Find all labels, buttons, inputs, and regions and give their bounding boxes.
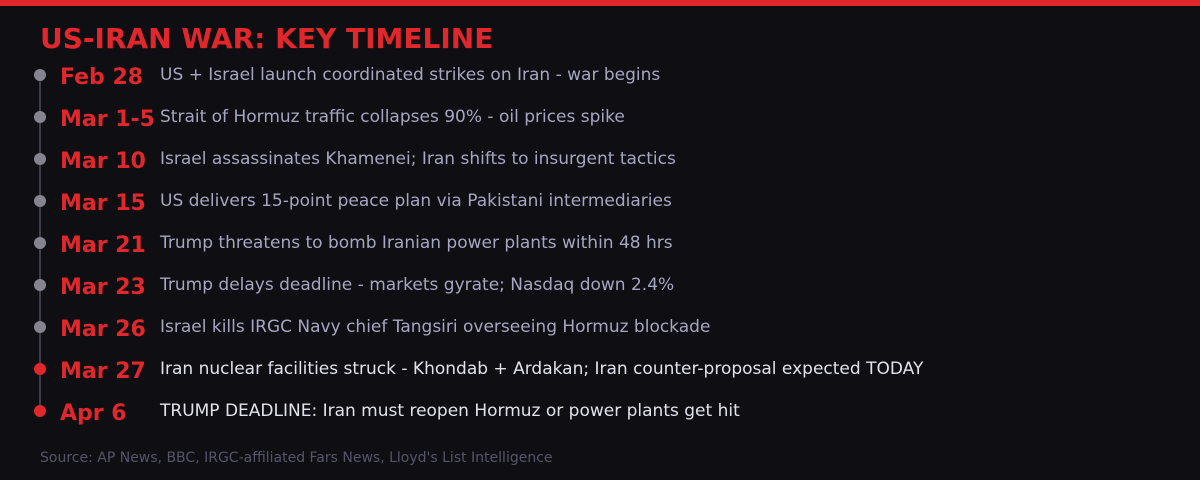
- event: Mar 21: Trump threatens to bomb Iranian power plants within 48 hrs: [160, 233, 673, 253]
- event: Feb 28: [34, 65, 660, 90]
- event: Mar 21: Mar 21: [60, 233, 146, 258]
- event: Mar 15: US delivers 15-point peace plan via Pakistani intermediaries: [160, 191, 672, 211]
- event: Apr 6: [34, 401, 740, 426]
- event: Mar 10: Israel assassinates Khamenei; Iran shifts to insurgent tactics: [160, 149, 676, 169]
- event: Mar 10: [34, 149, 676, 174]
- event: Mar 26: [34, 317, 710, 342]
- timeline: [34, 65, 924, 426]
- event: Mar 26: Mar 26: [60, 317, 146, 342]
- event: Mar 1-5: Mar 1-5: [60, 107, 155, 132]
- source: Source: AP News, BBC, IRGC-affiliated Fars News, Lloyd's List Intelligence: [40, 450, 553, 466]
- event: Mar 21: [34, 233, 673, 258]
- event: Mar 26: Israel kills IRGC Navy chief Tangsiri overseeing Hormuz blockade: [160, 317, 710, 337]
- event: Mar 27: Iran nuclear facilities struck - Khondab + Ardakan; Iran counter-proposal expected TODAY: [160, 359, 923, 379]
- event: Mar 10: Mar 10: [60, 149, 146, 174]
- title: US-IRAN WAR: KEY TIMELINE: [40, 22, 493, 55]
- event: Apr 6: Apr 6: [60, 401, 127, 426]
- event: Mar 23: Trump delays deadline - markets gyrate; Nasdaq down 2.4%: [160, 275, 674, 295]
- event: Feb 28: US + Israel launch coordinated strikes on Iran - war begins: [160, 65, 660, 85]
- event: Feb 28: Feb 28: [60, 65, 143, 90]
- timeline line: [39, 75, 41, 411]
- top bar: [0, 0, 1200, 6]
- event: Mar 15: Mar 15: [60, 191, 146, 216]
- event: Mar 1-5: [34, 107, 625, 132]
- event: Mar 23: [34, 275, 674, 300]
- event: Mar 15: [34, 191, 672, 216]
- event: Mar 27: [34, 359, 924, 384]
- event: Mar 1-5: Strait of Hormuz traffic collapses 90% - oil prices spike: [160, 107, 625, 127]
- event: Apr 6: TRUMP DEADLINE: Iran must reopen Hormuz or power plants get hit: [160, 401, 740, 421]
- event: Mar 23: Mar 23: [60, 275, 146, 300]
- event: Mar 27: Mar 27: [60, 359, 146, 384]
